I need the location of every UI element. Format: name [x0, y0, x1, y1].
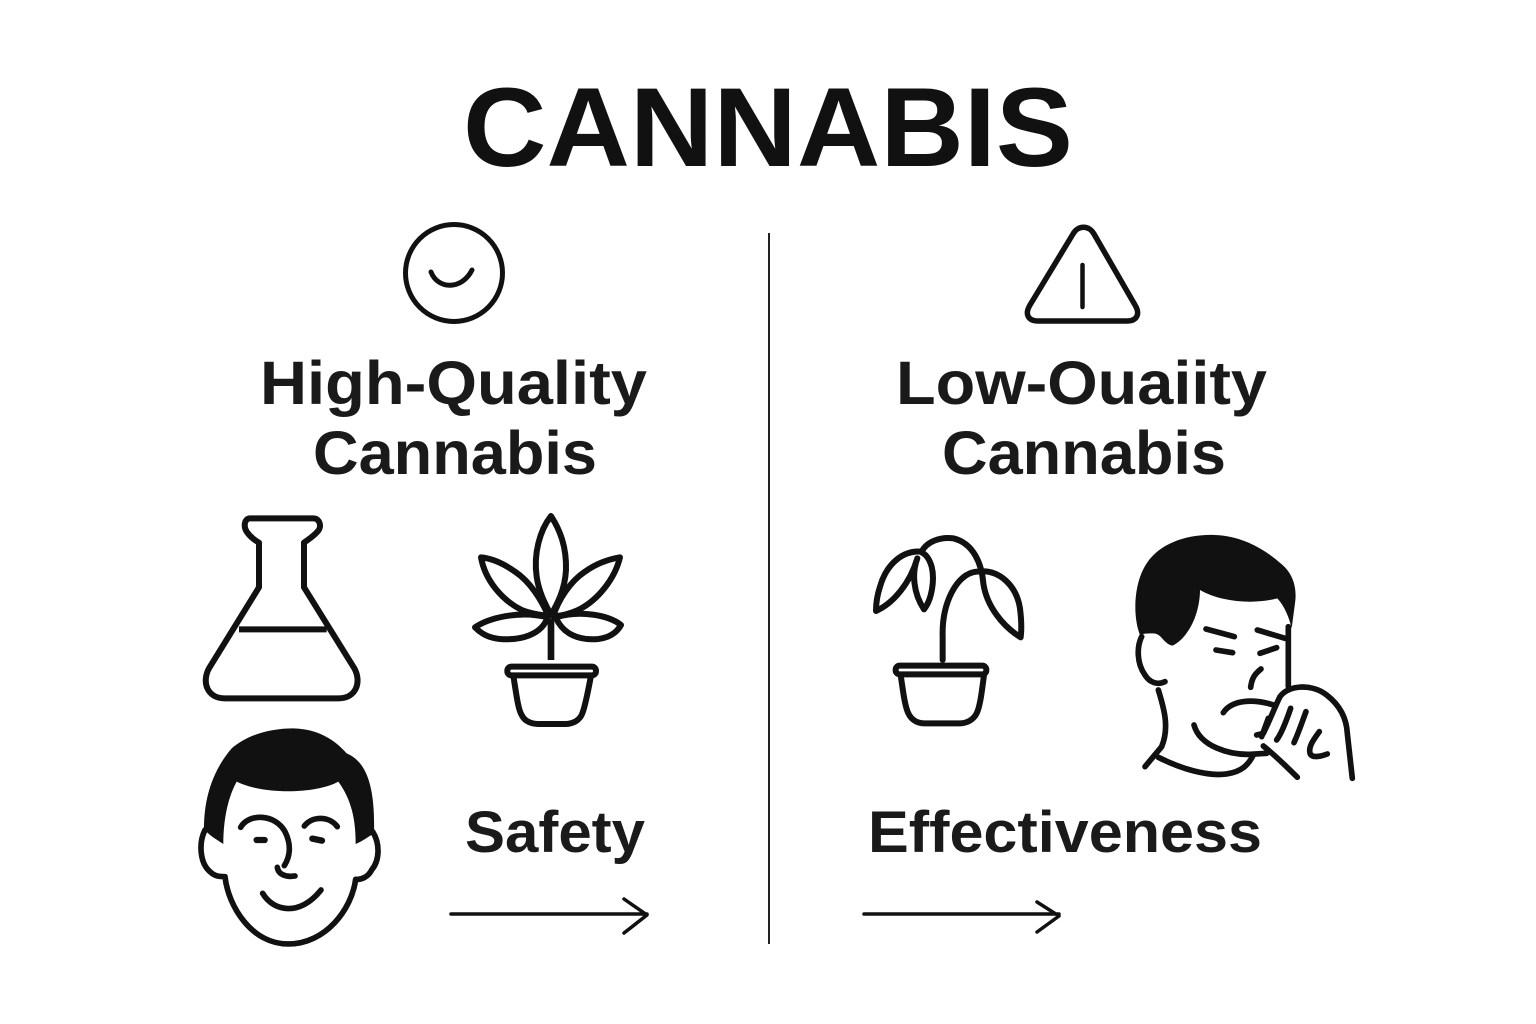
- heading: high-quality cannabis: High-Quality: [260, 349, 647, 417]
- label: effectiveness: Effectiveness: [868, 800, 1262, 865]
- heading: high-quality cannabis: Cannabis: [313, 419, 597, 487]
- arrow: effectiveness: [864, 902, 1059, 932]
- heading: low-quality cannabis: Low-Ouaiity: [896, 349, 1267, 417]
- label: safety: Safety: [465, 800, 645, 865]
- heading: low-quality cannabis: [896, 349, 1267, 487]
- icon: healthy plant: [475, 516, 621, 724]
- icon: wilted plant: [876, 538, 1021, 723]
- title: CANNABIS: [463, 65, 1073, 190]
- panel: low-quality cannabis: [864, 227, 1352, 932]
- divider: [768, 233, 770, 944]
- icon: warning triangle: [1027, 227, 1138, 321]
- icon: smiling person: [201, 728, 378, 944]
- heading: high-quality cannabis: [260, 349, 647, 487]
- icon: smiley: [406, 224, 502, 322]
- panel: high-quality cannabis: [201, 224, 647, 944]
- heading: low-quality cannabis: Cannabis: [942, 419, 1226, 487]
- icon: person covering nose: [1135, 535, 1352, 778]
- arrow: safety: [451, 899, 647, 933]
- icon: flask: [206, 518, 358, 698]
